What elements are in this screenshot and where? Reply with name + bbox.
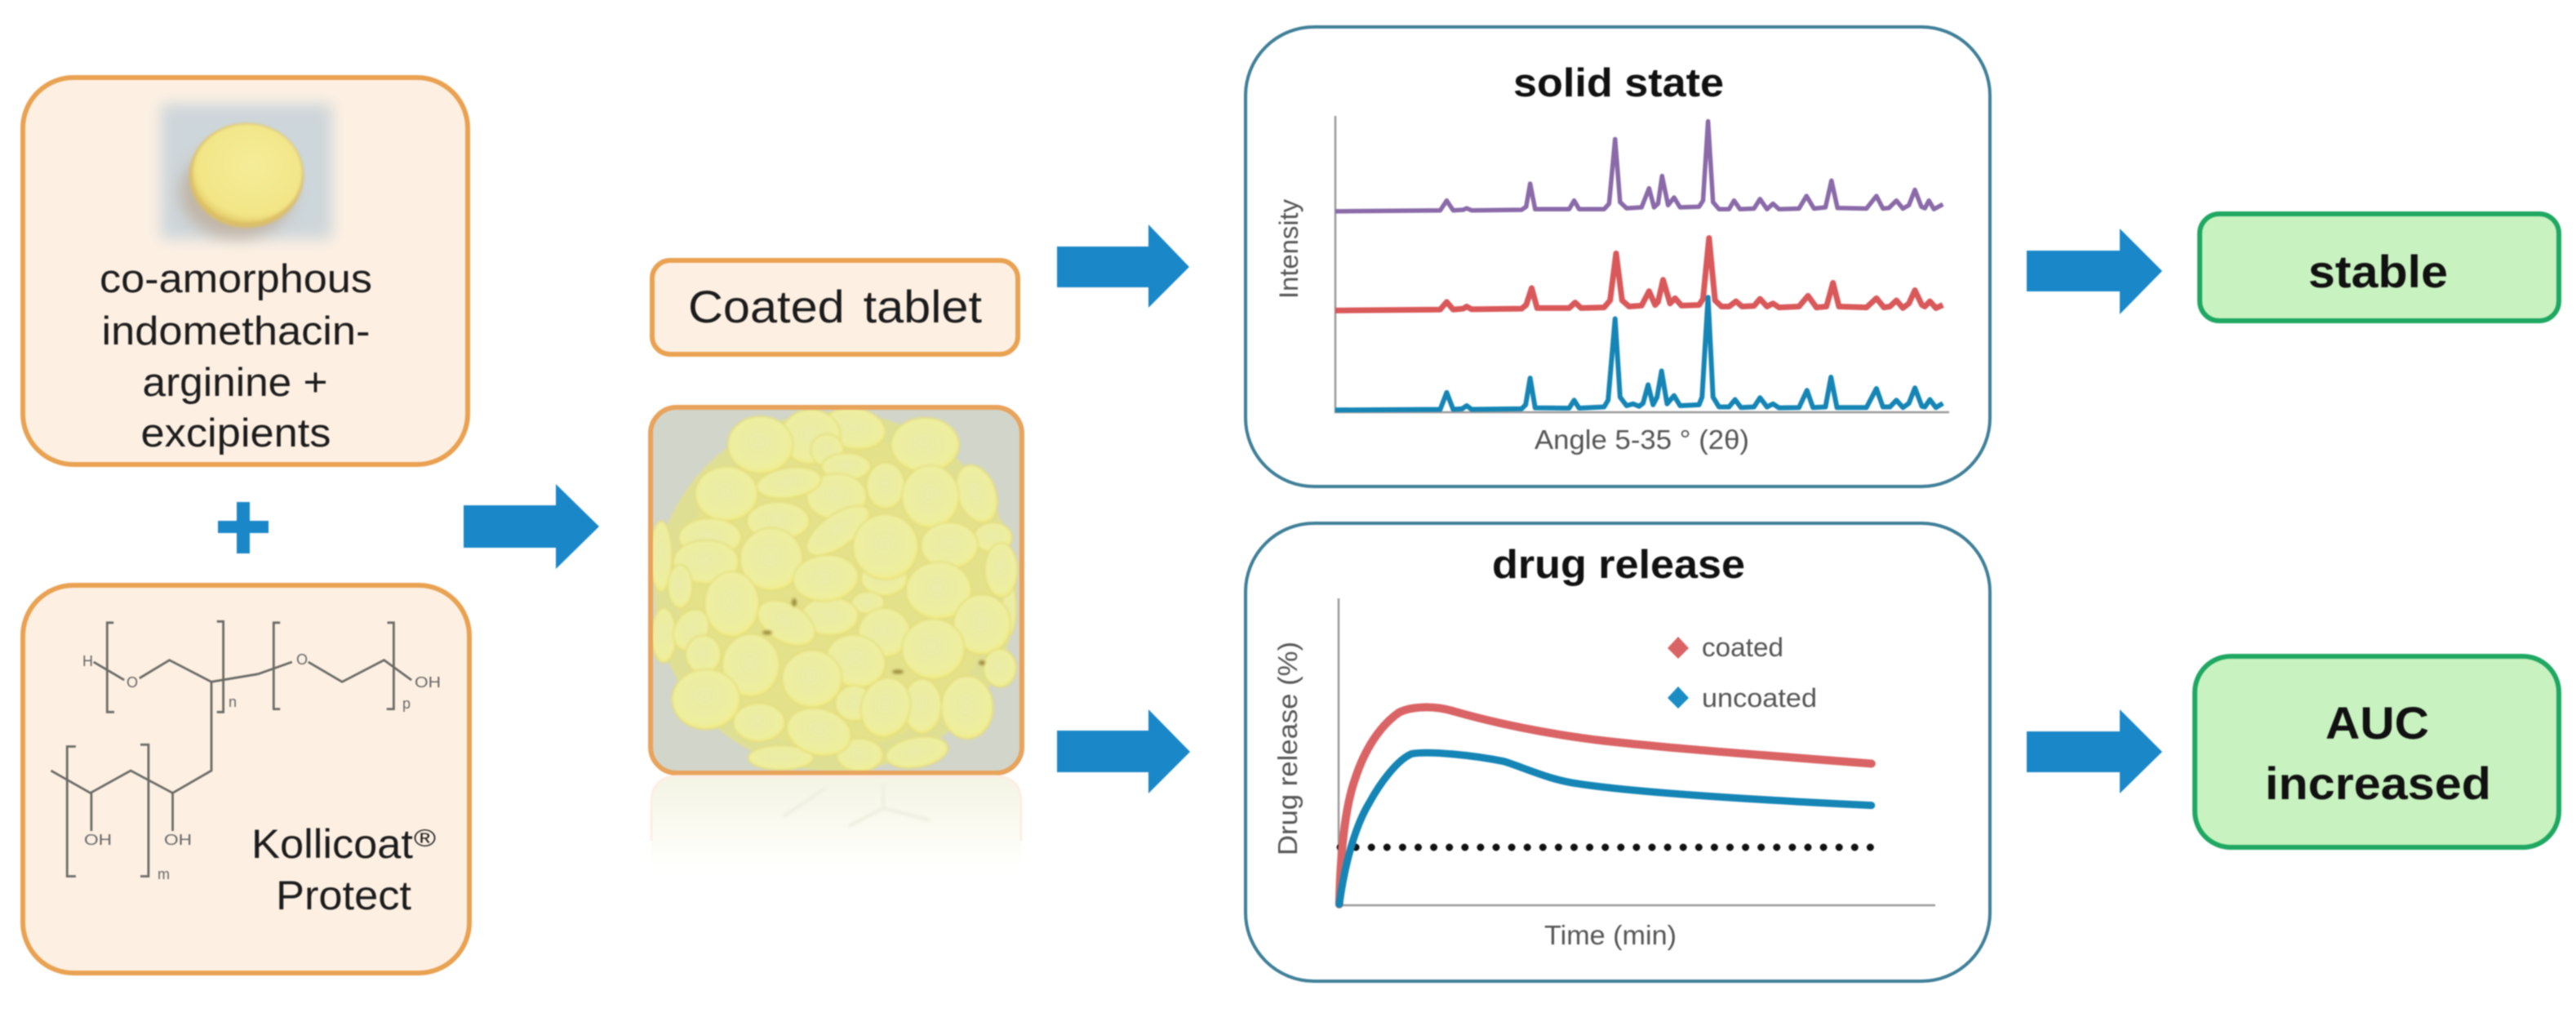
legend: uncoated: uncoated [1702, 683, 1817, 713]
chemical structure: O [127, 674, 138, 691]
text: co-amorphous indomethacin-arginine + excipients: arginine + [142, 361, 328, 405]
label: Coated tablet: Coated tablet [688, 281, 982, 332]
panel: Kollicoat Protect [23, 585, 469, 973]
x-axis label: Time: Time (min) [1544, 920, 1677, 950]
text: Kollicoat Protect [251, 821, 436, 918]
text: Kollicoat Protect: Kollicoat [251, 821, 413, 867]
arrow: drug release to AUC increased [2027, 709, 2162, 793]
chart: drug release curves [1272, 598, 1935, 950]
chemical structure: OH [164, 832, 192, 848]
chemical structure: n [229, 694, 237, 710]
heading: solid state: solid state [1513, 61, 1724, 105]
legend: coated: coated [1702, 633, 1783, 662]
chemical structure: OH [84, 832, 112, 848]
text: Kollicoat Protect: Protect [276, 873, 411, 918]
y-axis label: Drug release: Drug release (%) [1272, 642, 1303, 855]
result box: AUC increased: AUC [2325, 697, 2429, 749]
arrow: solid state to stable [2027, 229, 2162, 314]
arrow: coated tablet to solid state [1057, 224, 1189, 308]
heading: drug release: drug release [1492, 543, 1745, 587]
text: co-amorphous indomethacin-arginine + excipients: indomethacin- [101, 309, 371, 353]
result box: AUC increased: increased [2265, 758, 2491, 809]
photo reflection [651, 776, 1021, 872]
text: co-amorphous indomethacin-arginine + excipients: excipients [140, 411, 331, 455]
arrow: ingredients to coated tablet [464, 484, 599, 569]
label: Coated tablet [652, 260, 1018, 354]
photo: pile of coated tablets [651, 403, 1022, 773]
chemical structure: O [296, 651, 308, 668]
text: co-amorphous indomethacin-arginine + excipients [100, 257, 372, 455]
icon: plus sign [218, 502, 269, 553]
result box: stable [2200, 214, 2559, 321]
chemical structure: OH [415, 674, 441, 691]
chemical structure [51, 621, 441, 882]
panel: co-amorphous indomethacin-arginine with excipients [23, 78, 468, 464]
result box: AUC increased [2195, 656, 2559, 847]
icon: single yellow tablet photo [161, 104, 332, 239]
x-axis label: Angle: Angle 5-35 ° (2θ) [1534, 424, 1749, 455]
arrow: coated tablet to drug release [1057, 709, 1190, 793]
result box: stable: stable [2308, 246, 2448, 297]
legend: coated [1668, 633, 1783, 662]
text: Kollicoat Protect: ® [414, 825, 436, 852]
chemical structure: p [402, 695, 411, 712]
chart: XRPD diffractograms [1274, 116, 1949, 455]
panel: drug release [1246, 523, 1990, 981]
chemical structure: m [158, 866, 170, 882]
y-axis label: Intensity: Intensity [1274, 199, 1304, 299]
panel: solid state [1246, 27, 1990, 487]
chemical structure: H [82, 653, 93, 669]
text: co-amorphous indomethacin-arginine + excipients: co-amorphous [100, 257, 372, 301]
